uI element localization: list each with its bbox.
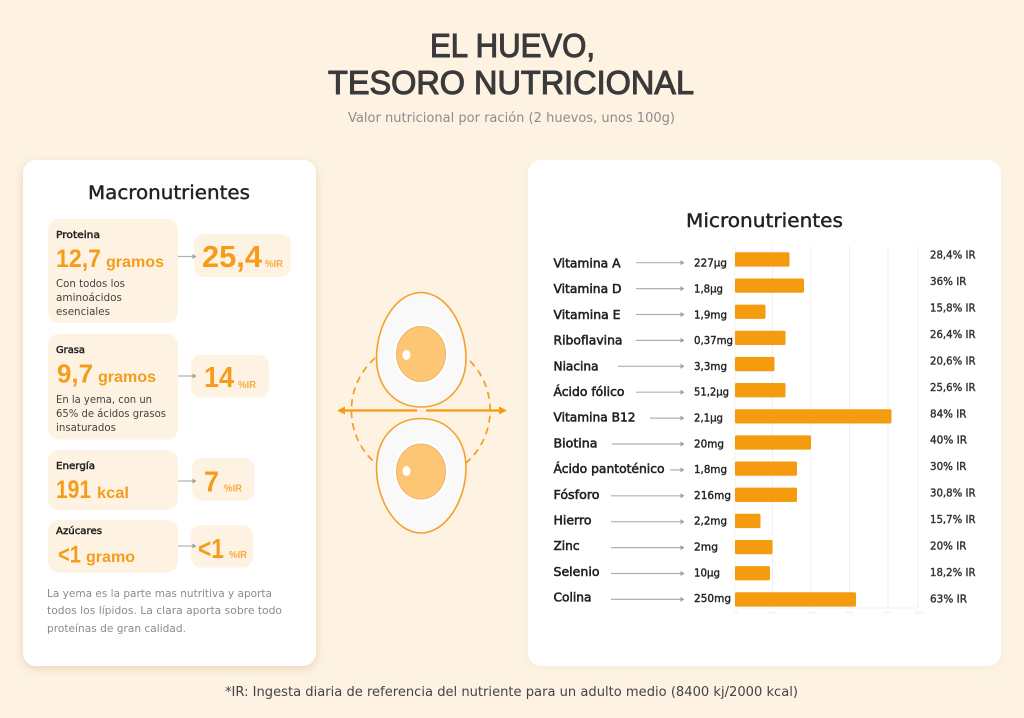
value: azucares IR — [191, 525, 253, 568]
title: TESORO NUTRICIONAL — [328, 64, 694, 101]
row: zinc: Zinc — [554, 539, 580, 553]
row: riboflavina — [554, 329, 976, 348]
row: zinc: 2mg — [694, 540, 718, 554]
card: proteina: aminoácidos — [56, 292, 122, 304]
row: vitamina A — [554, 250, 976, 270]
card: energia: 191 — [56, 476, 91, 504]
row: vitamina D: 1,8µg — [694, 282, 723, 296]
row: acido pantotenico — [554, 461, 966, 476]
note text: La yema es la parte mas nutritiva y aporta — [47, 587, 272, 600]
row: vitamina A: 28,4% IR — [930, 250, 976, 262]
chart grid: 20% — [769, 611, 777, 615]
chart grid — [733, 246, 925, 615]
row: selenio: 18,2% IR — [930, 567, 976, 579]
row: fosforo: Fósforo — [554, 488, 600, 502]
title — [328, 27, 694, 101]
icon: bottom egg half — [376, 418, 466, 533]
card: proteina: esenciales — [56, 306, 110, 318]
row: riboflavina: 26,4% IR — [930, 329, 976, 341]
row: acido pantotenico: 1,8mg — [694, 463, 727, 476]
row: vitamina E: 15,8% IR — [930, 303, 976, 315]
note text: proteínas de gran calidad. — [47, 622, 186, 635]
row: vitamina E — [554, 303, 976, 322]
value: energia IR: 7 — [204, 466, 219, 498]
double arrow — [337, 406, 507, 414]
note text — [47, 587, 282, 635]
subtitle: Valor nutricional por ración (2 huevos, unos 100g) — [348, 111, 675, 126]
row: acido folico: 25,6% IR — [930, 382, 976, 394]
card: azucares: <1 — [58, 542, 81, 568]
row: selenio: 10µg — [694, 566, 720, 579]
chart grid: 100% — [914, 611, 925, 615]
row: fosforo — [554, 488, 976, 502]
row: vitamina A: Vitamina A — [554, 256, 621, 270]
value: proteina IR: 25,4 — [202, 239, 263, 274]
row: niacina — [554, 355, 976, 373]
icon: top egg half — [376, 292, 466, 407]
value: proteina IR: %IR — [265, 259, 284, 270]
value: grasa IR: %IR — [238, 380, 257, 391]
row: biotina — [554, 435, 967, 450]
card: proteina: 12,7 — [56, 245, 101, 273]
row: biotina: Biotina — [554, 436, 598, 450]
card: energia: Energía — [56, 461, 95, 472]
row: colina: 250mg — [694, 592, 731, 605]
card: grasa: 65% de ácidos grasos — [56, 408, 166, 420]
row: acido folico: 51,2µg — [694, 386, 729, 399]
card: proteina: gramos — [106, 254, 164, 271]
card: proteina — [48, 219, 178, 323]
row: hierro: Hierro — [554, 514, 592, 528]
row: niacina: Niacina — [554, 359, 598, 373]
row: acido pantotenico: Ácido pantoténico — [554, 461, 664, 476]
row: vitamina A: 227µg — [694, 257, 727, 270]
value: proteina IR — [194, 234, 291, 277]
row: vitamina B12: 84% IR — [930, 408, 966, 420]
row: zinc — [554, 539, 966, 554]
title: EL HUEVO, — [430, 27, 595, 64]
value: azucares IR: <1 — [198, 533, 224, 564]
card: grasa: insaturados — [56, 422, 116, 434]
row: niacina: 3,3mg — [694, 360, 727, 373]
card: grasa: En la yema, con un — [56, 394, 152, 406]
row: colina: Colina — [554, 591, 592, 605]
row: vitamina D: 36% IR — [930, 276, 966, 288]
card: azucares: gramo — [86, 549, 135, 566]
row: riboflavina: Riboflavina — [554, 334, 622, 348]
card: energia — [48, 450, 178, 510]
card: grasa: Grasa — [56, 345, 85, 356]
panel: micronutrientes — [528, 160, 1001, 666]
row: biotina: 20mg — [694, 437, 724, 450]
arrow: grasa — [178, 374, 196, 378]
card: grasa: 9,7 — [57, 358, 93, 388]
row: fosforo: 216mg — [694, 489, 731, 502]
chart grid: 40% — [808, 611, 816, 615]
value: azucares IR: %IR — [229, 550, 248, 561]
card: grasa — [48, 334, 178, 440]
card: azucares — [48, 520, 178, 572]
row: acido pantotenico: 30% IR — [930, 461, 966, 473]
value: energia IR: %IR — [224, 484, 243, 494]
card: grasa: gramos — [98, 369, 156, 386]
dashed circle arcs — [351, 358, 490, 463]
row: hierro — [554, 514, 976, 528]
value: grasa IR — [191, 355, 269, 398]
panel: macronutrientes — [23, 160, 316, 666]
row: acido folico — [554, 382, 976, 399]
arrow: azucares — [178, 544, 196, 548]
row: selenio — [554, 565, 976, 580]
card: azucares: Azúcares — [56, 526, 102, 537]
row: colina — [554, 591, 967, 607]
row: vitamina E: 1,9mg — [694, 308, 727, 321]
row: acido folico: Ácido fólico — [554, 384, 624, 399]
row: colina: 63% IR — [930, 593, 967, 605]
value: grasa IR: 14 — [204, 362, 234, 394]
row: zinc: 20% IR — [930, 540, 966, 552]
card: proteina: Con todos los — [56, 278, 125, 290]
chart grid: 0% — [733, 611, 739, 615]
value: energia IR — [192, 458, 254, 500]
row: vitamina E: Vitamina E — [554, 308, 620, 322]
row: vitamina B12: Vitamina B12 — [554, 411, 636, 425]
row: vitamina D — [554, 276, 966, 296]
row: biotina: 40% IR — [930, 435, 967, 447]
heading: macronutrientes: Macronutrientes — [88, 183, 250, 204]
row: vitamina B12 — [554, 408, 966, 425]
row: hierro: 15,7% IR — [930, 514, 976, 526]
card: energia: kcal — [97, 485, 129, 502]
row: selenio: Selenio — [554, 565, 600, 579]
row: vitamina B12: 2,1µg — [694, 412, 723, 424]
heading: micronutrientes: Micronutrientes — [686, 211, 843, 232]
egg illustration — [337, 292, 507, 533]
row: riboflavina: 0,37mg — [694, 334, 733, 347]
arrow: proteina — [178, 254, 196, 259]
arrow: energia — [178, 478, 196, 484]
chart grid: 60% — [846, 611, 854, 615]
row: hierro: 2,2mg — [694, 515, 727, 528]
footnote: *IR: Ingesta diaria de referencia del nutriente para un adulto medio (8400 kj/2000 kcal) — [225, 685, 798, 700]
card: proteina: Proteina — [56, 230, 100, 241]
note text: todos los lípidos. La clara aporta sobre todo — [47, 604, 282, 617]
row: vitamina D: Vitamina D — [554, 282, 622, 296]
chart grid: 80% — [884, 611, 892, 615]
row: fosforo: 30,8% IR — [930, 488, 976, 500]
row: niacina: 20,6% IR — [930, 355, 976, 367]
